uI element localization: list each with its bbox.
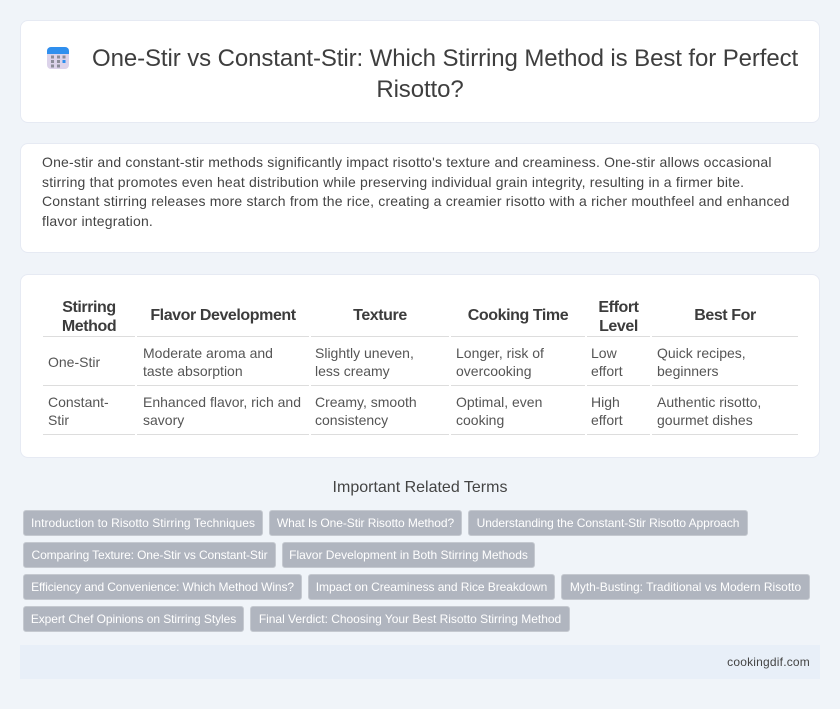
tag list: related terms: Impact on Creaminess and Rice Breakdown: [316, 580, 547, 594]
title: [92, 45, 798, 103]
table header row: Stirring: [62, 299, 116, 316]
table row: Constant-Stir: cooking: [456, 412, 504, 428]
tag list: related terms: What Is One-Stir Risotto Method?: [277, 516, 454, 530]
table row: Constant-Stir: consistency: [315, 412, 388, 428]
table header row: Method: [62, 318, 116, 335]
table row: One-Stir: less creamy: [315, 363, 390, 379]
table row: Constant-Stir: gourmet dishes: [657, 412, 753, 428]
table row: One-Stir: Quick recipes,: [657, 345, 746, 361]
tag list: related terms: Final Verdict: Choosing Your Best Risotto Stirring Method: [259, 612, 561, 626]
table header row: Best For: [694, 307, 756, 324]
title: Risotto?: [376, 76, 464, 103]
table row: One-Stir: One-Stir: [48, 354, 100, 370]
table row: Constant-Stir: Enhanced flavor, rich and: [143, 394, 301, 410]
tag list: related terms: Understanding the Constant-Stir Risotto Approach: [477, 516, 739, 530]
description text: flavor integration.: [42, 213, 153, 229]
tag list: related terms: Introduction to Risotto Stirring Techniques: [31, 516, 255, 530]
table row: Constant-Stir: Creamy, smooth: [315, 394, 417, 410]
tag list: related terms: Flavor Development in Both Stirring Methods: [289, 548, 528, 562]
footer source text: cookingdif.com: [727, 655, 810, 669]
table row: Constant-Stir: Constant-: [48, 394, 109, 410]
table row: Constant-Stir: Authentic risotto,: [657, 394, 761, 410]
panel: description: [20, 143, 820, 253]
table row: Constant-Stir: [48, 394, 761, 428]
table header row: Cooking Time: [468, 307, 568, 324]
description text: stirring that promotes even heat distribution while preserving individual grain integrity, resulting in a firmer bite.: [42, 174, 744, 190]
heading: related terms: Important Related Terms: [333, 479, 507, 496]
tag list: related terms: [23, 510, 810, 632]
table row: Constant-Stir: savory: [143, 412, 184, 428]
table row: One-Stir: beginners: [657, 363, 718, 379]
tag list: related terms: Comparing Texture: One-Stir vs Constant-Stir: [32, 548, 267, 562]
tag list: related terms: Expert Chef Opinions on Stirring Styles: [31, 612, 236, 626]
table row: Constant-Stir: effort: [591, 412, 623, 428]
table header row: Effort: [598, 299, 639, 316]
table row: One-Stir: Low: [591, 345, 617, 361]
table row: One-Stir: taste absorption: [143, 363, 243, 379]
tag list: related terms: Myth-Busting: Traditional vs Modern Risotto: [570, 580, 801, 594]
table row: Constant-Stir: Stir: [48, 412, 69, 428]
table header row: [62, 299, 756, 335]
panel: comparison table: [20, 274, 820, 458]
table row: One-Stir: overcooking: [456, 363, 532, 379]
table row: Constant-Stir: Optimal, even: [456, 394, 542, 410]
table row: Constant-Stir: High: [591, 394, 620, 410]
table row: One-Stir: Moderate aroma and: [143, 345, 273, 361]
title: One-Stir vs Constant-Stir: Which Stirring Method is Best for Perfect: [92, 45, 798, 72]
footer bar: [20, 645, 820, 679]
table row: One-Stir: Longer, risk of: [456, 345, 544, 361]
description text: Constant stirring releases more starch from the rice, creating a creamier risotto with a richer mouthfeel and enhanced: [42, 193, 790, 209]
table header row: Flavor Development: [150, 307, 296, 324]
table row: One-Stir: [48, 345, 746, 379]
panel: title header: [20, 20, 820, 123]
description text: [42, 154, 790, 229]
table row: One-Stir: Slightly uneven,: [315, 345, 414, 361]
table header row: Texture: [353, 307, 407, 324]
table header row: Level: [599, 318, 638, 335]
tag list: related terms: Efficiency and Convenience: Which Method Wins?: [31, 580, 294, 594]
icon: calendar: [47, 47, 69, 69]
table row: One-Stir: effort: [591, 363, 623, 379]
description text: One-stir and constant-stir methods significantly impact risotto's texture and creaminess. One-stir allows occasional: [42, 154, 772, 170]
